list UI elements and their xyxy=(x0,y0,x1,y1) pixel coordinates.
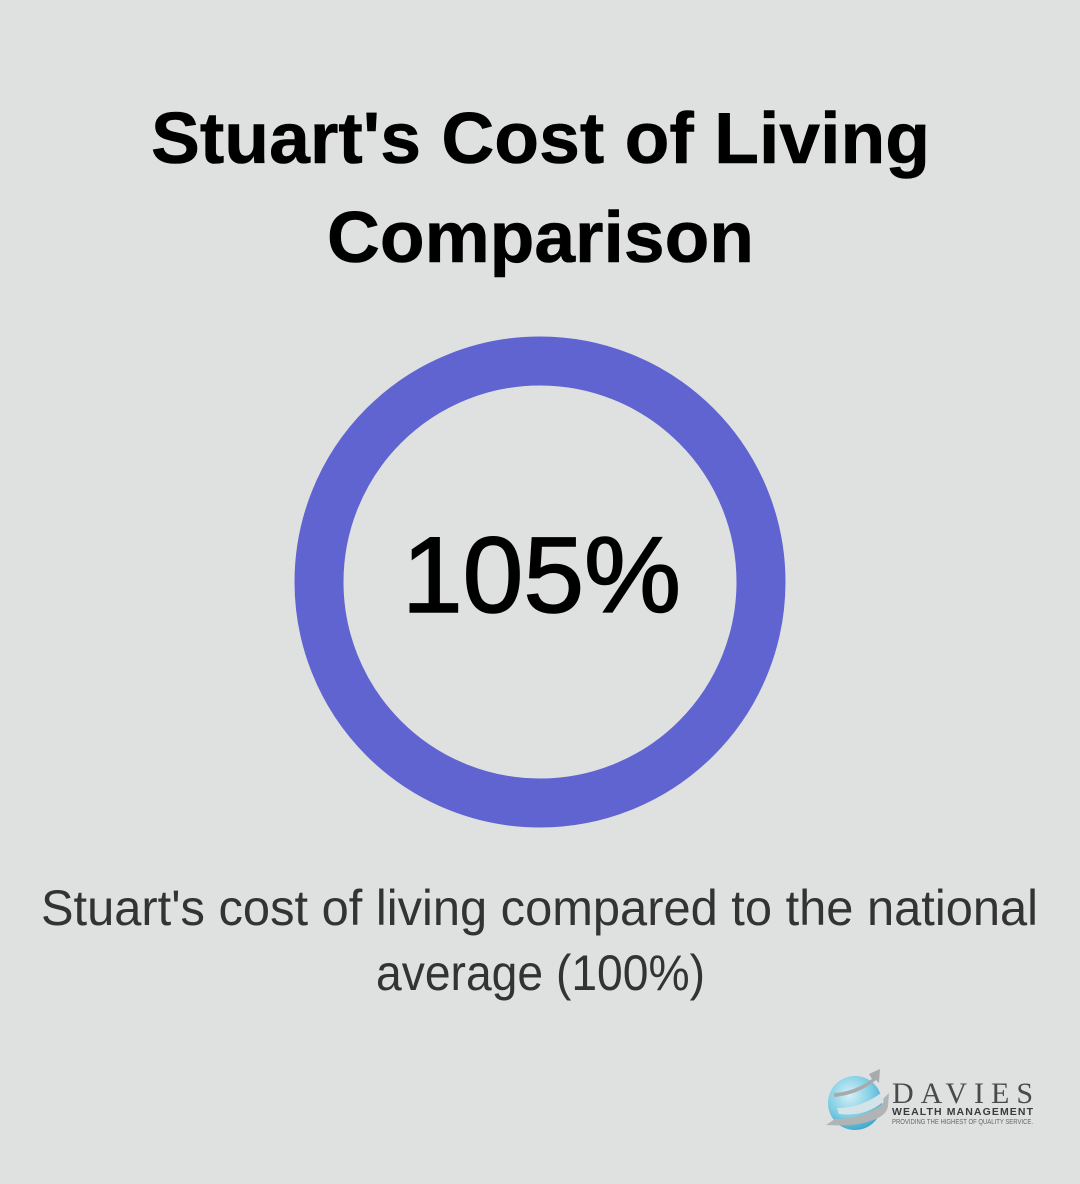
logo tagline: PROVIDING THE HIGHEST OF QUALITY SERVICE. xyxy=(892,1119,1033,1126)
title: Stuart's Cost of Living xyxy=(151,99,930,179)
caption: Stuart's cost of living compared to the national xyxy=(41,880,1038,936)
donut ring xyxy=(319,361,761,803)
logo wordmark: DAVIES xyxy=(892,1077,1033,1110)
caption xyxy=(41,880,1038,1001)
caption: average (100%) xyxy=(376,945,705,1001)
icon: globe with arrows xyxy=(826,1069,889,1130)
title xyxy=(151,99,930,278)
logo subtitle: WEALTH MANAGEMENT xyxy=(892,1106,1034,1118)
logo: Davies Wealth Management xyxy=(826,1069,1034,1130)
percentage value: 105% xyxy=(402,514,681,635)
title: Comparison xyxy=(327,198,754,278)
